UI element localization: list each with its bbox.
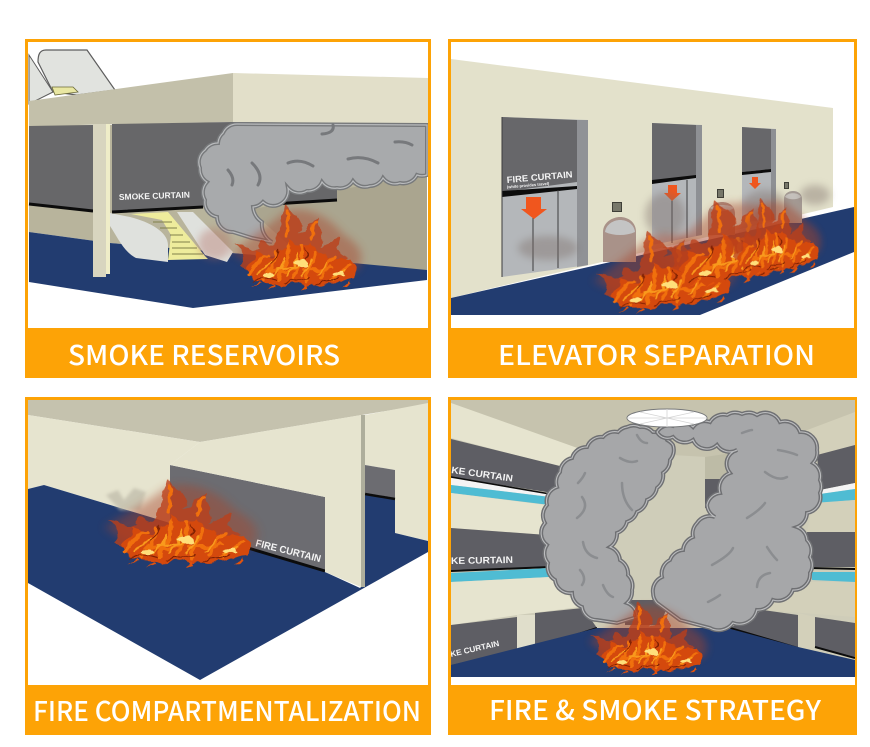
- smoke plume: [199, 124, 427, 242]
- panel frame: fire compartmentalization: [26, 398, 430, 734]
- left gallery levels: [451, 403, 597, 666]
- floor: [451, 628, 855, 677]
- fire curtain: [170, 465, 325, 572]
- central core: [625, 452, 738, 625]
- curtain labels: KE CURTAIN: [451, 465, 514, 485]
- atrium background: [451, 400, 855, 678]
- caption band: fire compartmentalization: FIRE COMPARTMENTALIZATION: [33, 690, 421, 729]
- illustration: compartment wall with fire curtain: [28, 400, 428, 680]
- curtain labels: [449, 465, 514, 659]
- floor: [29, 232, 427, 308]
- lobby wall: [451, 59, 833, 298]
- caption band: smoke reservoirs: SMOKE RESERVOIRS: [68, 334, 340, 373]
- smoke wisps: [106, 488, 146, 510]
- ceiling: [451, 400, 855, 457]
- panel frame: smoke reservoirs: [26, 40, 430, 376]
- fire: [589, 602, 707, 676]
- panel frame: fire and smoke strategy: [450, 398, 856, 734]
- elevator door 2: [652, 123, 702, 245]
- panel frame: elevator separation: [450, 40, 856, 376]
- right gallery levels: [730, 412, 855, 658]
- illustration: multi-storey atrium: [449, 400, 855, 678]
- fire: [592, 198, 824, 314]
- left wall: [28, 415, 200, 523]
- curtain labels: KE CURTAIN: [449, 639, 500, 659]
- caption band: elevator separation: ELEVATOR SEPARATION: [498, 334, 815, 373]
- waste bin 3: [784, 191, 802, 223]
- caption band: fire and smoke strategy: [448, 685, 857, 734]
- waste bin 1: [603, 217, 636, 262]
- right wall: [365, 403, 428, 541]
- caption band: fire and smoke strategy: FIRE & SMOKE STRATEGY: [489, 689, 821, 728]
- panel: fire compartmentalization: [25, 398, 431, 734]
- white strip under atrium floor: [451, 677, 855, 685]
- ceiling slab: [29, 73, 428, 126]
- arrow: curtain descends: [664, 185, 681, 201]
- caption band: smoke reservoirs: [25, 328, 431, 377]
- waste bin 2: [708, 202, 735, 235]
- fire curtain label: FIRE CURTAIN: [506, 169, 573, 185]
- elevator door 1: (white provides travel): [507, 181, 550, 189]
- lower escalator and stairs: [110, 212, 233, 262]
- elevator door 3: [742, 127, 776, 222]
- rear fire curtain: [365, 465, 395, 499]
- elevator door 1: [502, 117, 588, 277]
- panel: smoke reservoirs: [25, 40, 431, 377]
- fire: [105, 480, 257, 569]
- floor: [451, 207, 854, 315]
- structural pillar: [93, 124, 110, 277]
- smoke curtain, right bay: [112, 122, 337, 212]
- panel: elevator separation: [448, 40, 857, 377]
- smoke curtain label: SMOKE CURTAIN: [119, 190, 190, 202]
- smoke haze: [518, 185, 830, 260]
- upper escalator: [29, 50, 115, 104]
- caption band: elevator separation: [448, 328, 857, 377]
- smoke plume, left lobe: [541, 426, 674, 623]
- illustration: elevator lobby with fire curtains: [451, 59, 854, 319]
- skylight: [627, 409, 707, 427]
- arrow: curtain descends: [749, 177, 761, 189]
- arrow: curtain descends: [521, 197, 547, 219]
- smoke curtain, left bay: [29, 125, 93, 212]
- illustration: atrium with smoke curtain: [29, 50, 428, 308]
- smoke plume, right lobe: [653, 412, 821, 630]
- call buttons: [612, 182, 788, 212]
- fire: [233, 205, 361, 291]
- floor: [28, 485, 428, 680]
- curtain labels: KE CURTAIN: [451, 555, 513, 567]
- fire curtain label: FIRE CURTAIN: [254, 538, 322, 565]
- wall column: [170, 415, 365, 587]
- ceiling: [28, 400, 428, 442]
- panel: fire and smoke strategy: [448, 398, 857, 734]
